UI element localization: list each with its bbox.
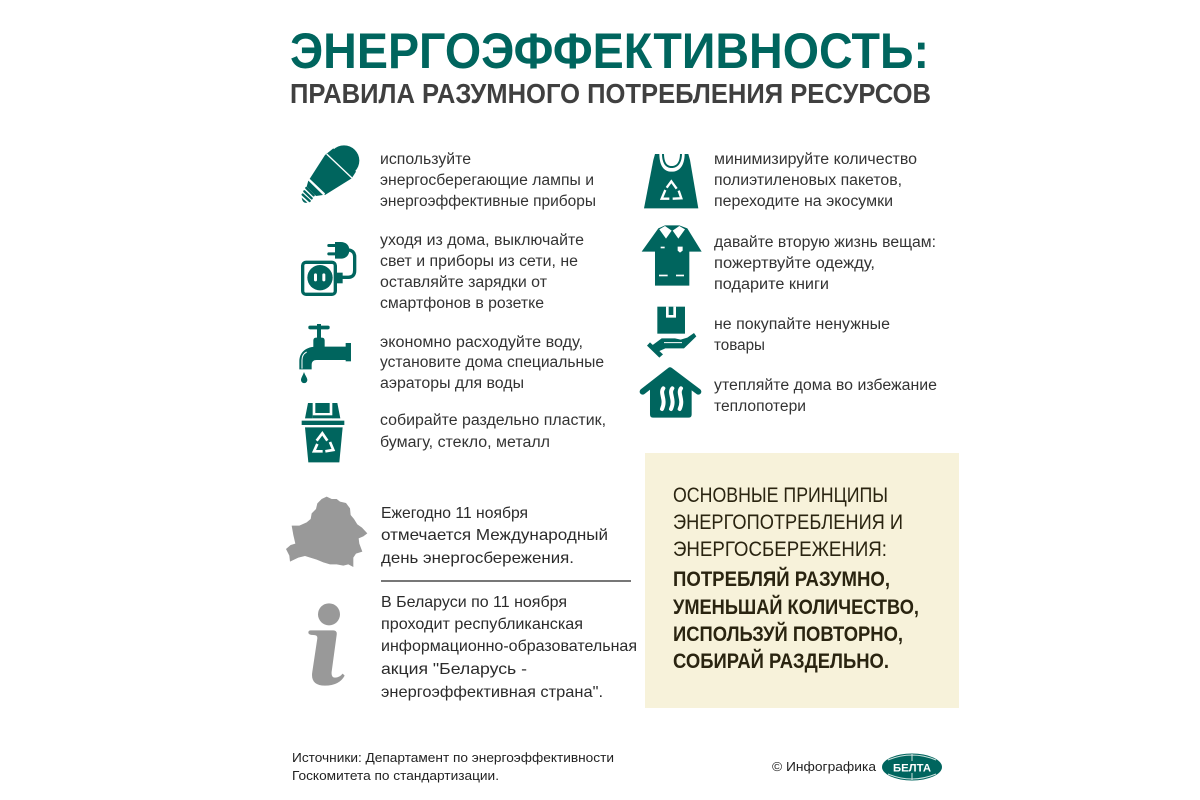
text: insulate: теплопотери: [714, 398, 806, 415]
text: campaign: проходит республиканская: [381, 616, 583, 633]
panel: principles: УМЕНЬШАЙ КОЛИЧЕСТВО,: [673, 595, 919, 619]
credit: © Инфографика: [772, 759, 877, 774]
sources: Госкомитета по стандартизации.: [292, 768, 499, 783]
logo: BELTA: [882, 754, 942, 780]
text: November 11: день энергосбережения.: [381, 550, 574, 567]
text: no needless goods: товары: [714, 337, 765, 354]
text: November 11: [381, 505, 608, 567]
text: second life: [714, 234, 936, 293]
text: unplug: [380, 232, 584, 312]
icon: info: [308, 603, 345, 686]
icon: shirt: [642, 225, 702, 286]
panel: principles: ПОТРЕБЛЯЙ РАЗУМНО,: [673, 567, 890, 591]
text: second life: подарите книги: [714, 276, 829, 293]
text: bags: полиэтиленовых пакетов,: [714, 172, 902, 189]
text: campaign: акция "Беларусь -: [381, 661, 527, 678]
text: lamps: используйте: [380, 151, 471, 168]
text: bags: переходите на экосумки: [714, 193, 893, 210]
icon: map of Belarus: [286, 497, 367, 567]
text: water: [380, 334, 604, 392]
text: water: экономно расходуйте воду,: [380, 334, 583, 351]
text: lamps: [380, 151, 596, 210]
text: unplug: оставляйте зарядки от: [380, 274, 547, 291]
text: sorting: [380, 412, 606, 451]
text: no needless goods: [714, 316, 890, 354]
text: lamps: энергосберегающие лампы и: [380, 172, 594, 189]
icon: plug and socket: [303, 242, 355, 294]
text: no needless goods: не покупайте ненужные: [714, 316, 890, 333]
text: campaign: В Беларуси по 11 ноября: [381, 594, 567, 611]
text: insulate: утепляйте дома во избежание: [714, 377, 937, 394]
text: bags: [714, 151, 917, 210]
panel: principles: ЭНЕРГОСБЕРЕЖЕНИЯ:: [673, 538, 887, 561]
icon: recycling bin: [302, 403, 344, 462]
text: sorting: собирайте раздельно пластик,: [380, 412, 606, 429]
text: second life: давайте вторую жизнь вещам:: [714, 234, 936, 251]
panel: principles: [645, 453, 959, 708]
panel: principles: ИСПОЛЬЗУЙ ПОВТОРНО,: [673, 622, 903, 646]
text: November 11: Ежегодно 11 ноября: [381, 505, 528, 522]
icon: light bulb: [302, 145, 359, 203]
text: water: установите дома специальные: [380, 354, 604, 371]
text: campaign: информационно-образовательная: [381, 638, 637, 655]
text: unplug: смартфонов в розетке: [380, 295, 544, 312]
text: campaign: энергоэффективная страна".: [381, 684, 603, 701]
text: second life: пожертвуйте одежду,: [714, 255, 875, 272]
icon: water tap: [299, 324, 351, 383]
text: November 11: отмечается Международный: [381, 527, 608, 544]
text: lamps: энергоэффективные приборы: [380, 193, 596, 210]
subtitle: ПРАВИЛА РАЗУМНОГО ПОТРЕБЛЕНИЯ РЕСУРСОВ: [290, 78, 931, 109]
icon: house with heat: [643, 370, 698, 418]
text: unplug: свет и приборы из сети, не: [380, 253, 578, 270]
panel: principles: СОБИРАЙ РАЗДЕЛЬНО.: [673, 649, 889, 673]
panel: principles: ЭНЕРГОПОТРЕБЛЕНИЯ И: [673, 511, 903, 534]
logo: BELTA: БЕЛТА: [893, 762, 931, 774]
text: sorting: бумагу, стекло, металл: [380, 434, 550, 451]
text: unplug: уходя из дома, выключайте: [380, 232, 584, 249]
text: insulate: [714, 377, 937, 415]
title: ЭНЕРГОЭФФЕКТИВНОСТЬ:: [290, 23, 929, 79]
text: bags: минимизируйте количество: [714, 151, 917, 168]
panel: principles: ОСНОВНЫЕ ПРИНЦИПЫ: [673, 484, 888, 507]
text: water: аэраторы для воды: [380, 375, 524, 392]
icon: eco bag: [644, 153, 698, 208]
icon: box in hand: [647, 307, 696, 358]
sources: [292, 750, 614, 783]
text: campaign: [381, 594, 637, 701]
sources: Источники: Департамент по энергоэффективности: [292, 750, 614, 765]
